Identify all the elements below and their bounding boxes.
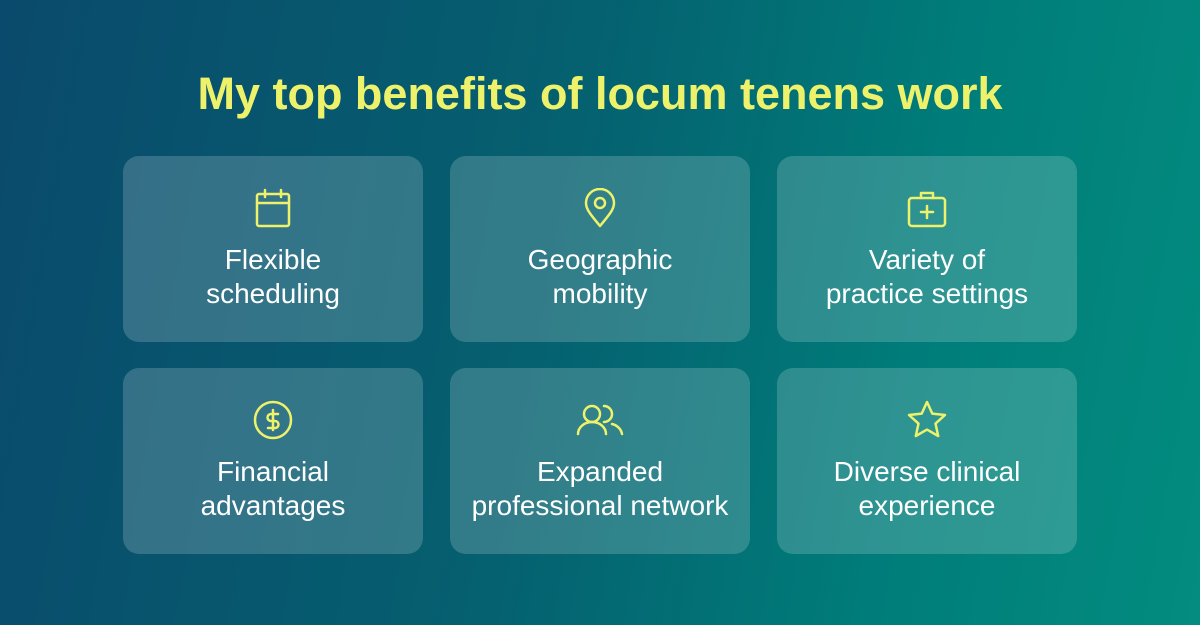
icon: dollar	[254, 400, 292, 440]
icon: star	[908, 400, 946, 438]
label	[834, 456, 1020, 521]
card: diverse clinical experience	[777, 368, 1077, 554]
icon: medical bag	[908, 192, 946, 228]
label: Flexible	[225, 244, 321, 275]
label: Geographic	[528, 244, 672, 275]
label: mobility	[553, 278, 647, 309]
label	[826, 244, 1028, 309]
card: variety of practice settings	[777, 156, 1077, 342]
icon: calendar	[256, 188, 290, 228]
label	[472, 456, 728, 521]
label: professional network	[472, 490, 728, 521]
card: expanded professional network	[450, 368, 750, 554]
icon: location pin	[584, 188, 616, 228]
label: Expanded	[537, 456, 663, 487]
label: Variety of	[869, 244, 985, 275]
label	[206, 244, 340, 309]
card: flexible scheduling	[123, 156, 423, 342]
label: practice settings	[826, 278, 1028, 309]
icon: people	[576, 404, 624, 436]
label: scheduling	[206, 278, 340, 309]
card: geographic mobility	[450, 156, 750, 342]
label	[528, 244, 672, 309]
title: My top benefits of locum tenens work	[197, 68, 1003, 119]
label	[201, 456, 345, 521]
label: advantages	[201, 490, 345, 521]
label: experience	[858, 490, 995, 521]
card: financial advantages	[123, 368, 423, 554]
label: Diverse clinical	[834, 456, 1020, 487]
label: Financial	[217, 456, 329, 487]
